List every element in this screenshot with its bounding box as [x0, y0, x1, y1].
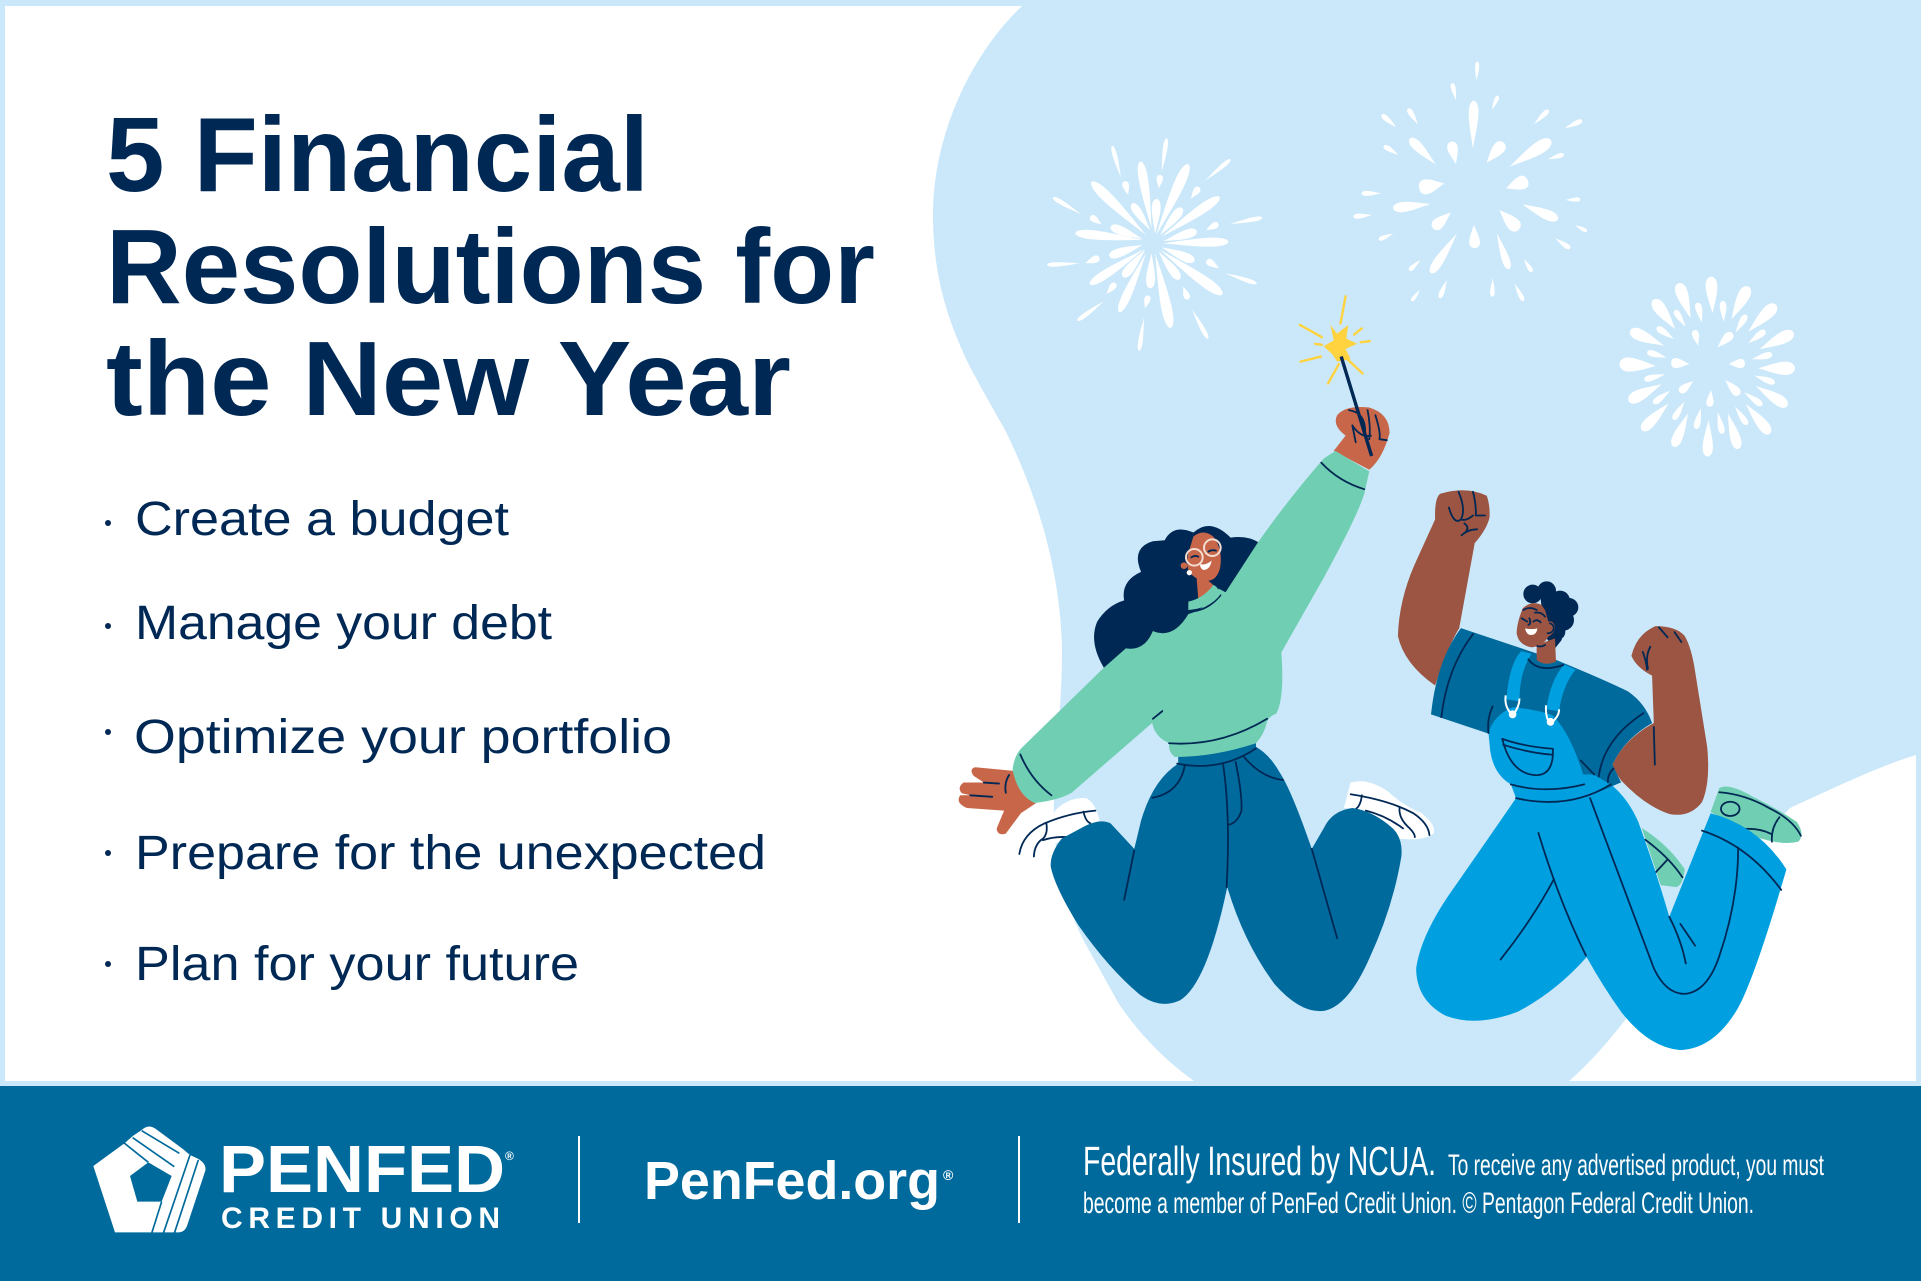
sweater	[1013, 451, 1369, 803]
earring	[1187, 570, 1192, 575]
divider	[578, 1136, 580, 1223]
smile	[1200, 561, 1212, 570]
ear	[1181, 562, 1187, 569]
raised hand	[1334, 407, 1390, 470]
woman jumping with sparkler	[959, 296, 1434, 1011]
item: debt: Manage your debt	[135, 597, 552, 650]
man's head	[1517, 581, 1578, 668]
neck and head	[1187, 532, 1221, 600]
website: PenFed.org	[644, 1151, 940, 1211]
collar	[1188, 585, 1220, 610]
white corner curve	[1569, 755, 1916, 1081]
footer bar	[0, 1086, 1921, 1281]
overalls legs	[1416, 784, 1786, 1050]
straps	[1506, 651, 1576, 711]
overalls bib	[1488, 707, 1611, 804]
light blue blob	[933, 6, 1916, 1081]
right shoe	[1344, 781, 1434, 839]
flexed arm	[1612, 626, 1708, 815]
logo mark	[93, 1127, 205, 1233]
glasses	[1186, 539, 1221, 566]
jeans	[1051, 739, 1402, 1011]
sparkler	[1300, 296, 1387, 456]
website: ®	[943, 1167, 954, 1183]
left hand	[959, 767, 1036, 834]
title: Resolutions for	[106, 208, 875, 326]
logo wordmark: ®	[505, 1149, 514, 1163]
back shoe	[1642, 828, 1685, 887]
fireworks	[1047, 62, 1796, 457]
item: portfolio: Optimize your portfolio	[134, 711, 672, 764]
item: unexpected: Prepare for the unexpected	[135, 827, 766, 880]
man jumping	[1398, 490, 1802, 1050]
firework right	[1619, 277, 1796, 457]
neck	[1537, 638, 1556, 664]
facial lines	[1522, 608, 1563, 668]
title	[106, 96, 875, 438]
front shoe	[1711, 787, 1802, 843]
left shoe	[1019, 798, 1099, 857]
clothing lines	[1441, 627, 1681, 802]
firework middle	[1353, 62, 1588, 302]
logo wordmark: PENFED	[219, 1132, 505, 1207]
t-shirt	[1431, 628, 1652, 794]
hair	[1094, 526, 1259, 678]
disclaimer: Federally Insured by NCUA.	[1083, 1138, 1436, 1184]
logo wordmark: CREDIT UNION	[221, 1202, 500, 1235]
resolutions list	[105, 493, 766, 991]
divider	[1018, 1136, 1020, 1223]
disclaimer	[1083, 1138, 1824, 1220]
item: budget: Create a budget	[135, 493, 509, 546]
title: the New Year	[106, 320, 791, 438]
face	[1517, 603, 1555, 647]
firework left	[1047, 138, 1263, 351]
title: 5 Financial	[106, 96, 649, 214]
buckles	[1505, 695, 1559, 726]
eyes	[1191, 550, 1216, 557]
item: future: Plan for your future	[135, 938, 579, 991]
raised arm	[1398, 490, 1490, 685]
woman's face	[1181, 532, 1221, 610]
hair	[1523, 581, 1578, 648]
smile	[1525, 628, 1537, 635]
logo wordmark	[219, 1132, 514, 1235]
